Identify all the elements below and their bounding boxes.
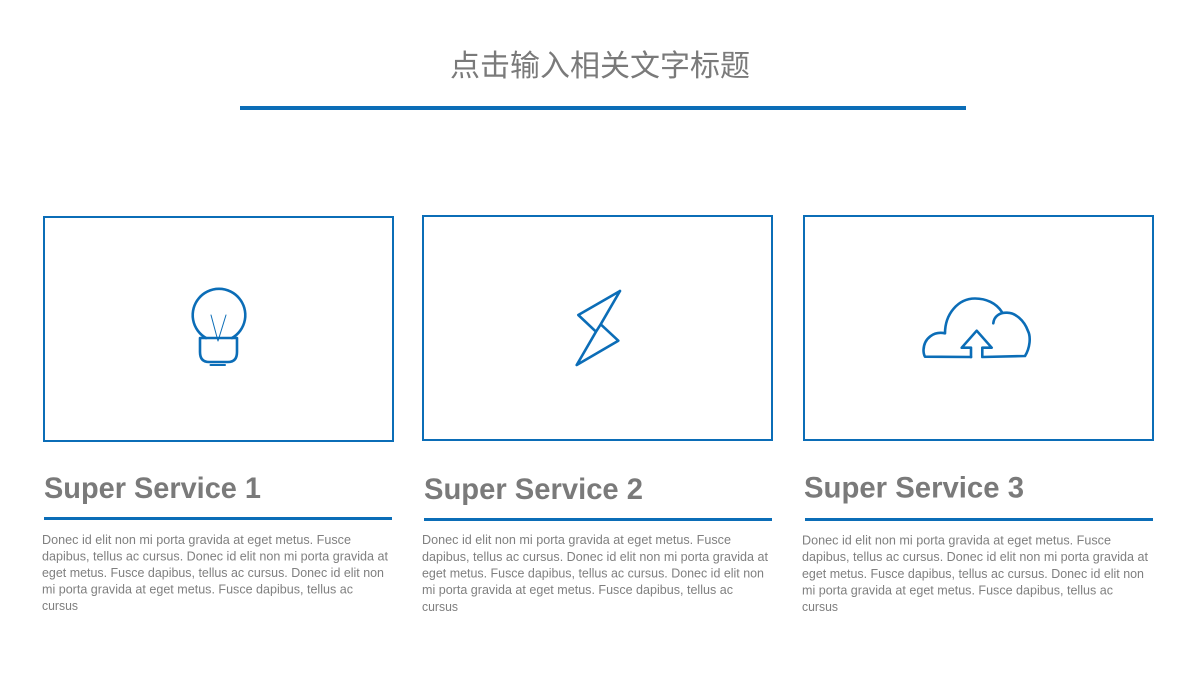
title underline xyxy=(240,106,966,110)
panel: service 3 xyxy=(802,216,1153,614)
heading rule 2 xyxy=(424,518,772,521)
body text 3: eget metus. Fusce dapibus, tellus ac cursus. Donec id elit non xyxy=(802,567,1144,581)
heading 2: Super Service 2 xyxy=(424,473,643,506)
heading 1: Super Service 1 xyxy=(44,472,261,505)
body text 2: Donec id elit non mi porta gravida at eget metus. Fusce xyxy=(422,533,731,547)
panel: service 1 xyxy=(42,217,393,613)
body text 2: dapibus, tellus ac cursus. Donec id elit non mi porta gravida at xyxy=(422,550,769,564)
body text 2: mi porta gravida at eget metus. Fusce dapibus, tellus ac xyxy=(422,583,733,597)
body text 1: Donec id elit non mi porta gravida at eget metus. Fusce xyxy=(42,533,351,547)
title: 点击输入相关文字标题 xyxy=(450,50,750,83)
icon: lightning bolt xyxy=(577,291,620,365)
body text 1: cursus xyxy=(42,599,78,613)
body text 3: cursus xyxy=(802,600,838,614)
heading 3: Super Service 3 xyxy=(804,472,1024,504)
panel: service 2 xyxy=(422,216,772,614)
body text 3 xyxy=(802,534,1149,614)
body text 3: mi porta gravida at eget metus. Fusce dapibus, tellus ac xyxy=(802,584,1113,598)
body text 1: dapibus, tellus ac cursus. Donec id elit non mi porta gravida at xyxy=(42,550,389,564)
heading rule 1 xyxy=(44,517,392,520)
icon: light bulb xyxy=(193,289,245,365)
image box 2 xyxy=(423,216,772,440)
body text 2: cursus xyxy=(422,600,458,614)
image box 3 xyxy=(804,216,1153,440)
body text 2 xyxy=(422,533,769,614)
body text 1 xyxy=(42,533,389,613)
icon: cloud upload xyxy=(924,298,1030,357)
body text 1: eget metus. Fusce dapibus, tellus ac cursus. Donec id elit non xyxy=(42,566,384,580)
body text 3: dapibus, tellus ac cursus. Donec id elit non mi porta gravida at xyxy=(802,550,1149,564)
image box 1 xyxy=(44,217,393,441)
body text 2: eget metus. Fusce dapibus, tellus ac cursus. Donec id elit non xyxy=(422,566,764,580)
body text 1: mi porta gravida at eget metus. Fusce dapibus, tellus ac xyxy=(42,582,353,596)
heading rule 3 xyxy=(805,518,1153,521)
body text 3: Donec id elit non mi porta gravida at eget metus. Fusce xyxy=(802,534,1111,548)
